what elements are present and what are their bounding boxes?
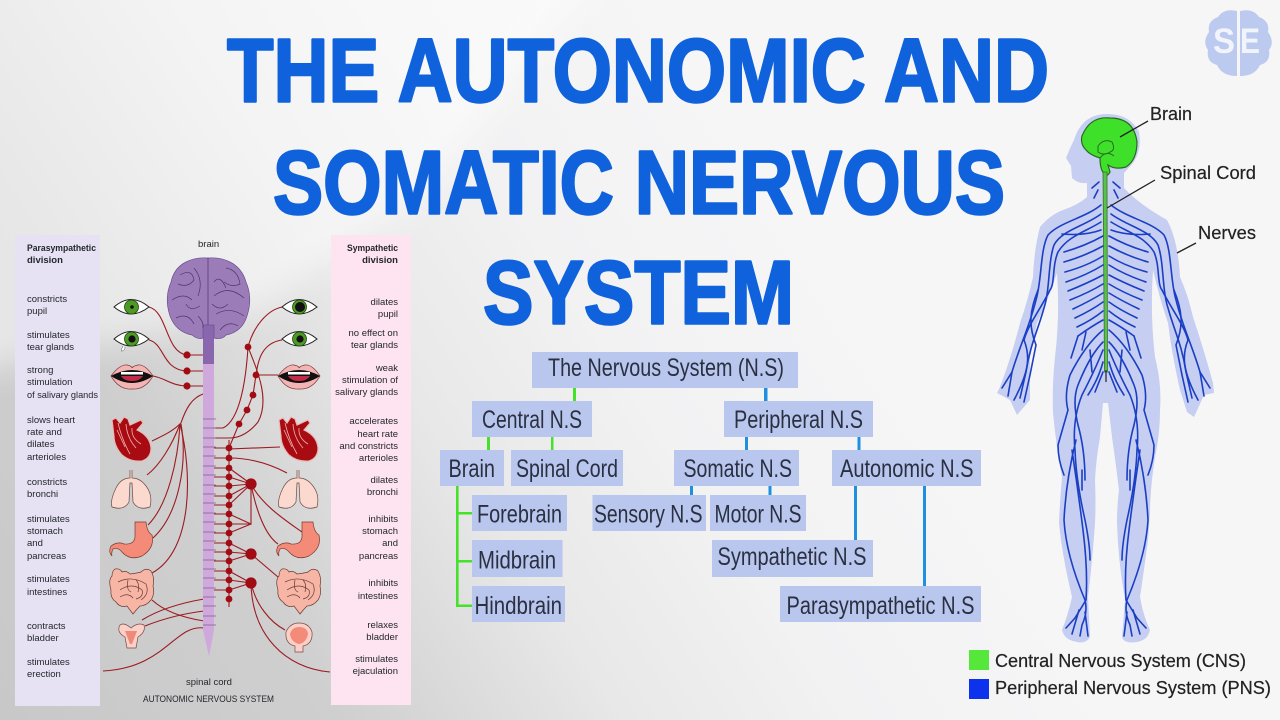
title: SYSTEM <box>483 244 794 344</box>
tree node: Brain: Brain <box>448 455 495 483</box>
icon: hearts <box>112 417 318 461</box>
panel: parasympathetic division: pancreas <box>27 551 66 562</box>
panel: sympathetic division: tear glands <box>351 340 398 351</box>
tree node: Parasympathetic N.S: Parasympathetic N.S <box>786 592 974 620</box>
panel: sympathetic division: salivary glands <box>335 387 398 398</box>
panel: sympathetic division: intestines <box>358 591 398 602</box>
tree node: Hindbrain: Hindbrain <box>474 592 562 620</box>
panel: parasympathetic division: intestines <box>27 587 67 598</box>
panel: parasympathetic division: stimulation <box>27 377 72 388</box>
icon: lungs <box>112 470 318 508</box>
tree node: Peripheral N.S <box>724 401 873 437</box>
tree node: Autonomic N.S: Autonomic N.S <box>840 455 974 483</box>
tree node: Forebrain <box>472 495 567 531</box>
panel: parasympathetic division: stimulates <box>27 657 70 668</box>
tree node: Parasympathetic N.S <box>780 586 981 622</box>
panel: parasympathetic division <box>15 235 100 706</box>
diagram labels: AUTONOMIC NERVOUS SYSTEM <box>143 694 274 705</box>
panel: sympathetic division: inhibits <box>368 578 398 589</box>
tree node: Peripheral N.S: Peripheral N.S <box>734 406 863 434</box>
panel: sympathetic division: ejaculation <box>353 666 398 677</box>
panel: sympathetic division: dilates <box>371 475 398 486</box>
panel: sympathetic division: stimulates <box>355 654 398 665</box>
peripheral nerves <box>1002 182 1210 636</box>
panel: parasympathetic division: stimulates <box>27 330 70 341</box>
tree node: Hindbrain <box>472 586 565 622</box>
logo: SE brain: E <box>1240 22 1260 61</box>
central nervous system: brain and spinal cord <box>1082 118 1137 382</box>
tree node: Central N.S: Central N.S <box>482 406 582 434</box>
panel: parasympathetic division: and <box>27 538 43 549</box>
panel: parasympathetic division: dilates <box>27 439 55 450</box>
spinal cord <box>203 320 216 656</box>
panel: sympathetic division: and <box>382 538 398 549</box>
logo: SE brain: S <box>1213 22 1235 61</box>
legend: central nervous system: Central Nervous System (CNS) <box>995 651 1246 671</box>
logo: SE brain <box>1205 10 1272 76</box>
panel: sympathetic division: relaxes <box>367 620 398 631</box>
tree node: The Nervous System <box>532 352 798 388</box>
panel: parasympathetic division: of salivary glands <box>27 390 98 401</box>
tree connectors <box>456 388 926 607</box>
tree node: Sensory N.S: Sensory N.S <box>594 500 702 528</box>
tree node: Forebrain: Forebrain <box>477 500 562 528</box>
panel: sympathetic division: bronchi <box>367 487 398 498</box>
panel: sympathetic division: Sympathetic <box>347 243 398 254</box>
tree node: Somatic N.S <box>674 450 799 486</box>
icon: lips <box>111 365 320 389</box>
panel: sympathetic division: pupil <box>378 309 398 320</box>
panel: sympathetic division: accelerates <box>349 416 398 427</box>
tree node: Central N.S <box>472 401 592 437</box>
panel: parasympathetic division: pupil <box>27 306 47 317</box>
icon: bladder <box>286 623 312 652</box>
body labels: brain: Brain <box>1150 104 1192 124</box>
panel: parasympathetic division: bladder <box>27 633 59 644</box>
panel: parasympathetic division: Parasympathetic <box>27 243 96 254</box>
diagram labels: brain <box>198 239 219 250</box>
body labels: nerves <box>1177 223 1256 253</box>
panel: parasympathetic division: constricts <box>27 294 67 305</box>
ganglia <box>183 344 259 602</box>
panel: sympathetic division: inhibits <box>368 514 398 525</box>
panel: parasympathetic division: stimulates <box>27 514 70 525</box>
tree node: Motor N.S: Motor N.S <box>714 500 802 528</box>
icon: intestines <box>110 569 321 614</box>
panel: sympathetic division: arterioles <box>359 453 398 464</box>
human body silhouette <box>997 114 1214 642</box>
nerve pathways <box>103 307 330 672</box>
panel: parasympathetic division: division <box>27 255 63 266</box>
icon: eyes <box>114 300 317 351</box>
panel: parasympathetic division: strong <box>27 365 53 376</box>
panel: sympathetic division: heart rate <box>357 429 398 440</box>
tree node: Midbrain <box>472 540 562 577</box>
tree node: Sympathetic N.S <box>712 540 873 577</box>
panel: parasympathetic division: tear glands <box>27 342 74 353</box>
panel: parasympathetic division: stimulates <box>27 574 70 585</box>
panel: sympathetic division: stimulation of <box>342 375 398 386</box>
panel: sympathetic division: and constricts <box>339 441 398 452</box>
body labels: spinal cord: Spinal Cord <box>1160 163 1256 183</box>
panel: sympathetic division <box>331 235 411 705</box>
panel: sympathetic division: pancreas <box>359 551 398 562</box>
tree node: Sympathetic N.S: Sympathetic N.S <box>718 543 866 571</box>
panel: parasympathetic division: bronchi <box>27 489 58 500</box>
panel: sympathetic division: division <box>362 255 398 266</box>
legend: peripheral nervous system: Peripheral Nervous System (PNS) <box>995 678 1271 698</box>
panel: sympathetic division: bladder <box>366 632 398 643</box>
title <box>227 22 1049 344</box>
brain illustration <box>167 258 250 339</box>
tree node: Spinal Cord <box>511 450 623 486</box>
panel: sympathetic division: weak <box>375 363 398 374</box>
tree node: Spinal Cord: Spinal Cord <box>516 455 618 483</box>
panel: parasympathetic division: slows heart <box>27 415 75 426</box>
title: THE AUTONOMIC AND <box>227 22 1049 122</box>
tree node: Sensory N.S <box>592 495 706 531</box>
icon: stomachs <box>110 522 320 558</box>
tree node: Midbrain: Midbrain <box>478 546 556 574</box>
tree node: The Nervous System: The Nervous System (N.S) <box>548 354 784 382</box>
body labels: nerves: Nerves <box>1198 223 1256 243</box>
body labels: brain <box>1120 104 1192 137</box>
panel: parasympathetic division: stomach <box>27 526 63 537</box>
diagram labels <box>143 239 274 705</box>
panel: parasympathetic division: rate and <box>27 427 62 438</box>
tree node: Autonomic N.S <box>832 450 981 486</box>
title: SOMATIC NERVOUS <box>273 134 1005 234</box>
panel: parasympathetic division: constricts <box>27 477 67 488</box>
body labels: spinal cord <box>1107 163 1256 208</box>
icon: uterus <box>119 624 144 648</box>
tree node: Brain <box>440 450 504 486</box>
tree node: Somatic N.S: Somatic N.S <box>684 455 792 483</box>
diagram labels: spinal cord <box>186 677 232 688</box>
panel: parasympathetic division: arterioles <box>27 452 66 463</box>
panel: sympathetic division: stomach <box>362 526 398 537</box>
panel: sympathetic division: dilates <box>371 297 398 308</box>
panel: sympathetic division: no effect on <box>349 328 398 339</box>
panel: parasympathetic division: contracts <box>27 621 66 632</box>
panel: parasympathetic division: erection <box>27 669 61 680</box>
tree node: Motor N.S <box>710 495 806 531</box>
